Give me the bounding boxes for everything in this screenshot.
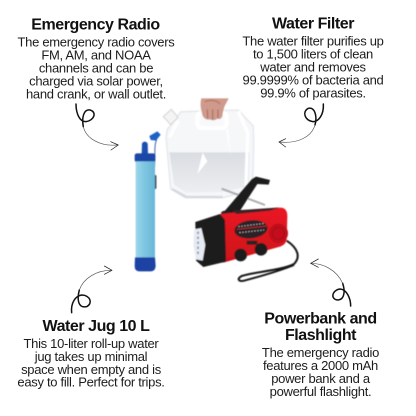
strap bbox=[239, 241, 298, 281]
crank knob bbox=[221, 211, 231, 215]
speaker bbox=[269, 224, 288, 243]
heading: Water Jug 10 L: Water Jug 10 L bbox=[43, 318, 150, 335]
text: water jug description: This 10-liter roll-up water bbox=[24, 336, 159, 351]
panel: water jug text bbox=[17, 318, 165, 390]
flashlight lens bbox=[193, 228, 205, 261]
cap bbox=[149, 131, 161, 141]
text: water jug description: jug takes up minimal bbox=[34, 349, 148, 364]
clip bbox=[153, 175, 156, 189]
heading: Powerbank and Flashlight: Flashlight bbox=[285, 327, 357, 344]
text: emergency radio description: channels and can be bbox=[39, 60, 153, 76]
arrow: powerbank text to radio bbox=[311, 259, 351, 306]
text: water jug description bbox=[17, 336, 165, 390]
arrow: water jug text to filter bbox=[72, 266, 112, 313]
text: water filter description: The water filter purifies up bbox=[242, 34, 384, 48]
icon: water jug with hand bbox=[163, 98, 254, 198]
knobs bbox=[234, 249, 247, 261]
front black housing bbox=[195, 214, 226, 267]
icon: blue water filter straw bbox=[135, 131, 161, 271]
tuning dial bbox=[233, 219, 269, 240]
red body bbox=[220, 208, 287, 263]
text: water jug description: easy to fill. Perfect for trips. bbox=[17, 374, 165, 390]
cap bbox=[163, 109, 178, 125]
collar bbox=[135, 153, 155, 162]
text: emergency radio description: FM, AM, and NOAA bbox=[41, 48, 151, 62]
panel: powerbank and flashlight text bbox=[262, 310, 379, 399]
text: water filter description: 99.9999% of bacteria and bbox=[243, 72, 384, 88]
text: powerbank description: The emergency radio bbox=[262, 345, 379, 360]
text: water jug description: space when empty and is bbox=[21, 362, 162, 377]
text: emergency radio description: The emergency radio covers bbox=[18, 34, 175, 50]
heading: Water Filter: Water Filter bbox=[272, 16, 354, 32]
antenna bbox=[222, 189, 265, 205]
text: powerbank description: features a 2000 mAh bbox=[263, 358, 378, 373]
text: water filter description bbox=[242, 34, 384, 100]
panel: water filter text bbox=[242, 16, 384, 100]
cord bbox=[153, 139, 157, 210]
icon: hand-crank emergency radio bbox=[193, 177, 298, 281]
hand bbox=[201, 98, 229, 120]
switch bbox=[247, 241, 257, 245]
tube bbox=[136, 161, 155, 259]
folds bbox=[169, 111, 248, 186]
water bbox=[169, 152, 249, 193]
heading: Emergency Radio: Emergency Radio bbox=[31, 16, 160, 34]
neck bbox=[142, 142, 148, 154]
bottom cap bbox=[135, 257, 156, 271]
text: emergency radio description: hand crank, or wall outlet. bbox=[26, 86, 166, 102]
text: powerbank description bbox=[262, 345, 379, 399]
handle bbox=[197, 113, 227, 128]
text: powerbank description: powerful flashlight. bbox=[270, 384, 371, 399]
arrow: water filter text to jug bbox=[279, 104, 323, 147]
text: water filter description: 99.9% of parasites. bbox=[260, 86, 366, 100]
top strip bbox=[232, 207, 280, 214]
panel: emergency radio text bbox=[18, 16, 175, 102]
arrow: emergency radio to filter bbox=[76, 104, 118, 150]
heading: Powerbank and Flashlight: Powerbank and bbox=[264, 310, 377, 328]
text: water filter description: water and removes bbox=[259, 60, 367, 74]
text: powerbank description: power bank and a bbox=[271, 371, 371, 386]
text: emergency radio description bbox=[18, 34, 175, 102]
text: water filter description: to 1,500 liters of clean bbox=[253, 46, 373, 62]
heading: Powerbank and Flashlight bbox=[264, 310, 377, 344]
crank handle bbox=[223, 177, 270, 213]
bag body bbox=[166, 110, 254, 198]
text: emergency radio description: charged via solar power, bbox=[29, 74, 163, 88]
